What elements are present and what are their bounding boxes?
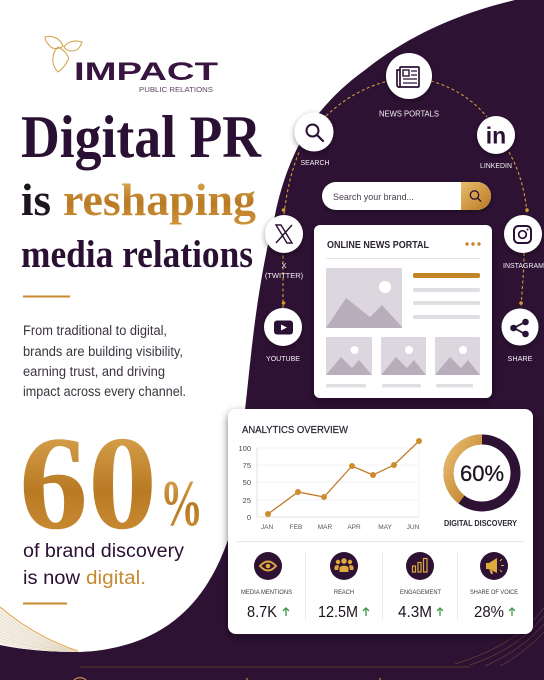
data line	[268, 441, 419, 514]
thumbnail 3	[435, 337, 480, 375]
channel: search	[294, 112, 334, 167]
channel: instagram	[503, 215, 544, 270]
metric: share of voice	[470, 552, 518, 621]
arrow	[363, 608, 369, 616]
x axis labels: FEB	[290, 524, 302, 531]
arrow	[509, 608, 515, 616]
label: SHARE	[508, 354, 532, 363]
x axis labels: APR	[347, 524, 361, 531]
title line 2: is	[21, 175, 51, 225]
divider rule	[23, 296, 70, 298]
decorative gold lines bottom right	[455, 608, 544, 666]
metric: media mentions	[241, 552, 292, 621]
intro paragraph	[23, 323, 186, 399]
channel: news portals	[379, 53, 439, 118]
icon: instagram	[504, 215, 542, 253]
label: SEARCH	[300, 158, 330, 167]
statistic caption: is now	[23, 568, 80, 589]
icon: bars	[406, 552, 434, 580]
y axis labels: 50	[243, 478, 251, 487]
tagline: PUBLIC RELATIONS	[139, 85, 213, 94]
donut value: 60%	[460, 461, 504, 486]
search bar	[322, 182, 491, 210]
y axis labels	[238, 444, 251, 522]
statistic caption	[23, 541, 185, 589]
icon: share	[502, 308, 538, 346]
icon: magnifier	[294, 112, 334, 152]
label: REACH	[334, 590, 354, 596]
statistic caption: digital.	[86, 568, 146, 589]
icon: youtube	[264, 308, 302, 346]
big statistic: 60	[19, 409, 157, 557]
thumbnail 2	[381, 337, 426, 375]
x axis labels: JUN	[407, 524, 420, 531]
big statistic: %	[160, 467, 203, 540]
donut label: DIGITAL DISCOVERY	[444, 519, 518, 528]
arrow	[283, 608, 289, 616]
icon: linkedin: in	[486, 122, 506, 148]
donut chart	[444, 440, 518, 528]
title line 1: Digital PR	[21, 104, 262, 170]
placeholder: Search your brand...	[333, 192, 414, 202]
decorative fine lines bottom left	[0, 607, 78, 655]
wordmark: IMPACT	[74, 58, 218, 86]
icon: megaphone	[480, 552, 508, 580]
x axis labels: MAY	[378, 524, 392, 531]
title line 2: reshaping	[63, 175, 257, 225]
y axis labels: 25	[243, 496, 251, 505]
intro paragraph: From traditional to digital,	[23, 323, 167, 338]
channel: linkedin	[477, 116, 515, 170]
icon: x	[265, 215, 303, 253]
thumbnail captions	[326, 384, 473, 388]
x axis labels: MAR	[318, 524, 333, 531]
channel: share	[502, 308, 538, 363]
menu dots	[465, 242, 481, 246]
portal heading: ONLINE NEWS PORTAL	[327, 240, 429, 251]
panel: online news portal	[314, 225, 492, 398]
y axis labels: 0	[247, 513, 251, 522]
logo	[45, 36, 218, 94]
value: 12.5M	[318, 604, 358, 621]
x axis labels: JAN	[261, 524, 273, 531]
icon: gold trefoil	[45, 36, 82, 72]
intro paragraph: brands are building visibility,	[23, 344, 183, 359]
line chart	[238, 438, 422, 531]
y axis labels: 75	[243, 461, 251, 470]
bottom cropped gold marks	[74, 678, 380, 680]
statistic caption: of brand discovery	[23, 541, 185, 562]
caption rule	[23, 602, 67, 604]
thumbnail 1	[326, 337, 372, 375]
value: 4.3M	[398, 604, 432, 621]
arrow	[437, 608, 443, 616]
metric: reach	[318, 552, 369, 621]
title	[21, 104, 262, 276]
value: 28%	[474, 604, 504, 621]
panel: analytics overview	[228, 409, 533, 634]
search button	[461, 182, 491, 210]
hero image placeholder	[326, 268, 402, 328]
connector dots	[282, 208, 529, 305]
analytics heading: ANALYTICS OVERVIEW	[242, 424, 348, 436]
bottom divider	[80, 666, 470, 668]
title line 3: media relations	[21, 233, 253, 276]
metric: engagement	[398, 552, 443, 621]
x axis labels	[261, 524, 420, 531]
icon: search	[470, 191, 481, 202]
icon: people	[330, 552, 358, 580]
label: YOUTUBE	[266, 354, 300, 363]
intro paragraph: impact across every channel.	[23, 384, 186, 399]
y axis labels: 100	[238, 444, 251, 453]
label: ENGAGEMENT	[400, 590, 441, 596]
data points	[265, 438, 422, 517]
value: 8.7K	[247, 604, 277, 621]
label: NEWS PORTALS	[379, 110, 439, 118]
label: (TWITTER)	[265, 271, 304, 280]
label: SHARE OF VOICE	[470, 590, 518, 596]
icon: newspaper	[386, 53, 432, 99]
channel: youtube	[264, 308, 302, 363]
article lines	[413, 273, 480, 319]
channel: x twitter	[265, 215, 304, 280]
icon: eye	[254, 552, 282, 580]
dashed connector network	[283, 81, 527, 308]
label: LINKEDIN	[480, 161, 512, 170]
label: X	[281, 261, 287, 270]
intro paragraph: earning trust, and driving	[23, 364, 165, 379]
label: MEDIA MENTIONS	[241, 590, 292, 596]
